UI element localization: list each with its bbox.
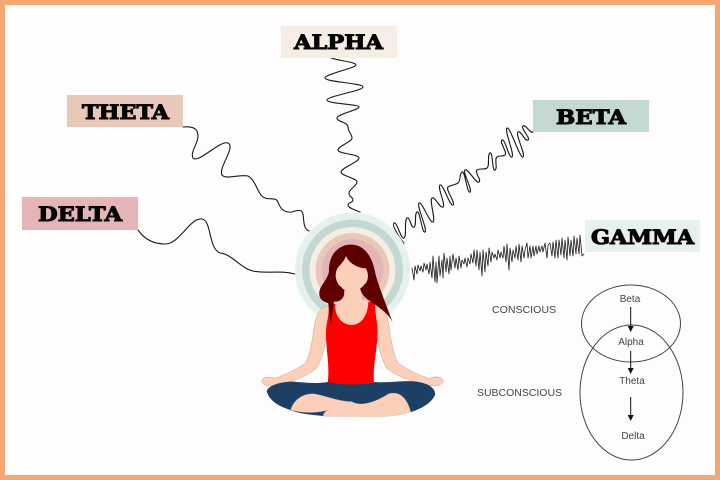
label: gamma: GAMMA — [591, 225, 695, 249]
label: beta: BETA — [556, 105, 627, 129]
diagram text: CONSCIOUS — [492, 305, 556, 316]
label: alpha: ALPHA — [293, 30, 384, 54]
diagram text: Theta — [619, 376, 645, 387]
diagram arrows — [628, 307, 634, 421]
diagram text: Beta — [620, 294, 641, 305]
aura rings — [295, 212, 410, 328]
diagram text: SUBCONSCIOUS — [477, 388, 562, 399]
wave: gamma — [412, 235, 584, 283]
diagram text: Alpha — [618, 337, 644, 348]
wave: beta — [393, 126, 533, 243]
wave: theta — [183, 127, 309, 231]
pants — [267, 381, 435, 416]
face — [336, 256, 368, 291]
arms, neck and torso skin — [262, 287, 443, 386]
legs and feet — [291, 393, 411, 417]
diagram: conscious and subconscious — [477, 285, 683, 460]
meditating woman — [262, 245, 443, 417]
label: theta: THETA — [82, 100, 170, 124]
label: theta — [67, 95, 183, 127]
wave: alpha — [325, 58, 363, 212]
label: gamma — [585, 220, 700, 252]
diagram text: Delta — [621, 431, 645, 442]
tank top — [326, 302, 378, 385]
label: delta — [22, 197, 138, 230]
diagram ellipses — [580, 285, 683, 460]
hair — [319, 245, 393, 324]
diagram text — [477, 294, 645, 442]
label: alpha — [281, 26, 397, 58]
label: beta — [533, 100, 649, 132]
label: delta: DELTA — [38, 202, 123, 226]
wave: delta — [138, 219, 295, 274]
